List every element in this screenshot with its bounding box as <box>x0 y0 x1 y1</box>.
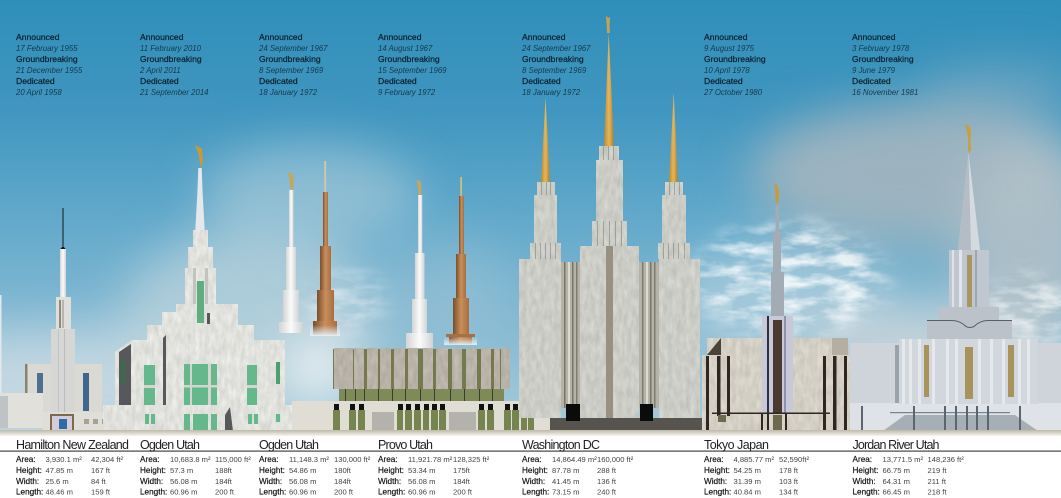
timeline: Tokyo: 27 October 1980 <box>703 88 763 97</box>
timeline: Provo: 9 February 1972 <box>378 88 436 97</box>
timeline: Washington DC: 18 January 1972 <box>522 88 581 97</box>
timeline: Ogden 1972: Dedicated <box>259 76 298 86</box>
stats: Washington DC: Length: <box>522 488 549 496</box>
stats: Tokyo Japan: 31.39 m <box>734 477 761 486</box>
timeline: Ogden 1972: Announced <box>259 32 303 42</box>
stats: Hamilton New Zealand: Area: <box>16 455 36 464</box>
stats: Washington DC: Height: <box>522 466 548 475</box>
grey spire <box>771 205 784 316</box>
low base <box>292 401 550 431</box>
stats: Provo Utah: 60.96 m <box>408 488 435 496</box>
stats: Hamilton New Zealand: Hamilton New Zealand <box>16 438 129 452</box>
stats: Hamilton New Zealand: 167 ft <box>91 466 111 475</box>
building: Ogden Utah original spires <box>279 161 340 336</box>
timeline: Jordan River: 16 November 1981 <box>852 88 918 97</box>
timeline: Ogden 1972: 24 September 1967 <box>258 44 328 53</box>
stats: Washington DC: 288 ft <box>597 466 617 475</box>
statue: gold angel <box>774 183 779 205</box>
green bays with black caps <box>333 410 534 431</box>
stats: Tokyo Japan: 52,590ft² <box>779 455 809 464</box>
stats: Jordan River Utah: 13,771.5 m² <box>882 455 923 464</box>
stats: Ogden Utah 2014: 10,683.8 m² <box>170 455 211 464</box>
stats: Jordan River Utah: Width: <box>852 477 876 486</box>
stats: Tokyo Japan: Length: <box>704 488 731 496</box>
building: Tokyo Japan temple <box>702 183 852 431</box>
stats: Tokyo Japan: Width: <box>704 477 727 486</box>
stats: Provo Utah: Area: <box>378 455 398 464</box>
timeline: Jordan River: 9 June 1979 <box>852 66 896 75</box>
timeline: Hamilton: 20 April 1958 <box>15 88 62 97</box>
shadow recesses <box>119 313 233 431</box>
stats: Ogden Utah 1972: Height: <box>259 466 285 475</box>
stats: Provo Utah: Height: <box>378 466 404 475</box>
timeline: Jordan River: Dedicated <box>852 76 891 86</box>
timeline: Ogden 1972: 8 September 1969 <box>259 66 324 75</box>
bronze spire <box>310 161 340 336</box>
timeline: Provo: 15 September 1969 <box>378 66 447 75</box>
timeline: Hamilton: 21 December 1955 <box>15 66 83 75</box>
timeline: Ogden 1972: Groundbreaking <box>259 54 321 64</box>
stats: Tokyo Japan: Height: <box>704 466 730 475</box>
timeline: Washington DC: Announced <box>522 32 566 42</box>
building: Washington DC temple <box>519 16 710 432</box>
timeline: Washington DC <box>521 32 591 97</box>
stats: Hamilton New Zealand: 48.46 m <box>46 488 73 496</box>
timeline: Ogden 2014: 11 February 2010 <box>140 44 202 53</box>
stats: Washington DC: 14,864.49 m² <box>552 455 597 464</box>
timeline: Provo: 14 August 1967 <box>378 44 433 53</box>
stats: Ogden Utah 2014: Length: <box>140 488 167 496</box>
ribbed bays <box>561 262 659 408</box>
stats: Hamilton New Zealand <box>16 438 129 496</box>
stats: Ogden Utah 1972: 180ft <box>334 466 352 475</box>
stats: Jordan River Utah: 218 ft <box>928 488 947 496</box>
stats: Washington DC: 160,000 ft² <box>597 455 634 464</box>
stats: Provo Utah: 11,921.78 m² <box>408 455 453 464</box>
stats: Ogden Utah 2014: 60.96 m <box>170 488 197 496</box>
stats: Ogden Utah 1972: Ogden Utah <box>259 438 319 452</box>
stats: Jordan River Utah: 219 ft <box>928 466 947 475</box>
stats: Hamilton New Zealand: 3,930.1 m² <box>46 455 82 464</box>
timeline: Jordan River <box>852 32 918 97</box>
stats: Washington DC: Width: <box>522 477 545 486</box>
timeline: Tokyo: Groundbreaking <box>704 54 766 64</box>
dark stripes <box>706 356 847 431</box>
timeline: Tokyo: 10 April 1978 <box>704 66 750 75</box>
stats: Ogden Utah 1972: 130,000 ft² <box>334 455 371 464</box>
stats: Hamilton New Zealand: 25.6 m <box>46 477 69 486</box>
stats: Washington DC: 240 ft <box>597 488 617 496</box>
stats: Ogden Utah 2014: 56.08 m <box>170 477 197 486</box>
timeline: Ogden 2014: 21 September 2014 <box>139 88 209 97</box>
stats: Hamilton New Zealand: Width: <box>16 477 39 486</box>
timeline: Tokyo: Dedicated <box>704 76 743 86</box>
timeline: Provo <box>378 32 447 97</box>
white spire <box>406 180 433 348</box>
stats: Ogden Utah 2014: Height: <box>140 466 166 475</box>
tower <box>927 250 1012 340</box>
timeline: Hamilton: 17 February 1955 <box>16 44 78 53</box>
timeline: Washington DC: 24 September 1967 <box>521 44 591 53</box>
statue: gold angel <box>965 124 971 153</box>
stats: Jordan River Utah: 64.31 m <box>882 477 910 486</box>
stats: Hamilton New Zealand: 42,304 ft² <box>91 455 124 464</box>
side wings <box>850 343 1061 403</box>
stats: Tokyo Japan: 54.25 m <box>734 466 761 475</box>
stats: Tokyo Japan: 103 ft <box>779 477 799 486</box>
timeline: Ogden 2014: Groundbreaking <box>140 54 202 64</box>
stats: Tokyo Japan: 4,885.77 m² <box>734 455 774 464</box>
doors and plinth <box>550 404 710 432</box>
stats: Ogden Utah 1972: 54.86 m <box>289 466 316 475</box>
timeline: Provo: Announced <box>378 32 422 42</box>
stats: Washington DC: 41.45 m <box>552 477 579 486</box>
stats: Washington DC: 73.15 m <box>552 488 579 496</box>
stats: Provo Utah: Width: <box>378 477 401 486</box>
stats: Ogden Utah 1972 <box>259 438 371 496</box>
timeline: Hamilton: Announced <box>16 32 60 42</box>
timeline: Ogden 1972 <box>258 32 328 97</box>
stats: Hamilton New Zealand: 84 ft <box>91 477 107 486</box>
timeline: Jordan River: 3 February 1978 <box>852 44 910 53</box>
stats: Washington DC: 136 ft <box>597 477 617 486</box>
spire <box>958 153 980 250</box>
timeline: Ogden 2014: Dedicated <box>140 76 179 86</box>
stats: Tokyo Japan: 134 ft <box>779 488 799 496</box>
entrance <box>860 404 1061 431</box>
stats: Ogden Utah 1972: 200 ft <box>334 488 354 496</box>
main ribbed body <box>895 339 1038 404</box>
stats: Ogden Utah 1972: 56.08 m <box>289 477 316 486</box>
stats: Ogden Utah 2014: Width: <box>140 477 163 486</box>
stats: Provo Utah: Length: <box>378 488 405 496</box>
building: Ogden Utah temple (2014) <box>103 145 330 431</box>
stats: Ogden Utah 2014: 200 ft <box>215 488 235 496</box>
stats: Provo Utah: 128,325 ft² <box>453 455 490 464</box>
timeline: Ogden 2014: 2 April 2011 <box>139 66 181 75</box>
upper box panels <box>333 348 510 389</box>
stats: Jordan River Utah: 148,236 ft² <box>928 455 964 464</box>
stats: Tokyo Japan <box>704 438 809 496</box>
stats: Jordan River Utah: 66.45 m <box>882 488 910 496</box>
Hamilton spire <box>51 208 75 413</box>
stats: Washington DC <box>522 438 634 496</box>
timeline: Jordan River: Announced <box>852 32 896 42</box>
central tower <box>762 316 793 413</box>
stats: Jordan River Utah: Length: <box>852 488 880 496</box>
green windows <box>144 362 317 430</box>
timeline: Tokyo: 9 August 1975 <box>704 44 755 53</box>
stats: Provo Utah <box>378 438 490 496</box>
ground strip <box>0 430 1061 437</box>
stats: Washington DC: 87.78 m <box>552 466 579 475</box>
timeline: Washington DC: Groundbreaking <box>522 54 584 64</box>
stats: Provo Utah: 53.34 m <box>408 466 435 475</box>
stats: Ogden Utah 1972: 184ft <box>334 477 352 486</box>
timeline: Ogden 1972: 18 January 1972 <box>259 88 318 97</box>
timeline: Hamilton <box>15 32 83 97</box>
building: Hamilton New Zealand temple <box>0 208 125 430</box>
stats: Provo Utah: 200 ft <box>453 488 473 496</box>
stats: Ogden Utah 1972: Area: <box>259 455 279 464</box>
stats: Tokyo Japan: 40.84 m <box>734 488 761 496</box>
stats: Jordan River Utah: Jordan River Utah <box>852 438 940 452</box>
timeline: Ogden 2014 <box>139 32 209 97</box>
green band <box>339 389 504 401</box>
statue: gold angel <box>606 16 610 33</box>
stats: Jordan River Utah: Height: <box>852 466 878 475</box>
building: Provo Utah temple <box>292 177 550 431</box>
stats: Ogden Utah 2014: Area: <box>140 455 160 464</box>
Hamilton wings <box>0 364 125 430</box>
stats: Ogden Utah 1972: Length: <box>259 488 286 496</box>
stats: Tokyo Japan: Area: <box>704 455 724 464</box>
timeline: Tokyo <box>703 32 766 97</box>
timeline: Hamilton: Groundbreaking <box>16 54 78 64</box>
stone blocks <box>702 338 852 431</box>
statue: gold angel <box>195 145 203 168</box>
stats: Jordan River Utah <box>852 438 964 496</box>
stats: Jordan River Utah: 211 ft <box>928 477 947 486</box>
timeline: Provo: Groundbreaking <box>378 54 440 64</box>
stats: Tokyo Japan: Tokyo Japan <box>704 438 769 452</box>
stats: Washington DC: Washington DC <box>522 438 600 452</box>
central ornamental strip <box>606 246 613 418</box>
stats: Ogden Utah 2014: 188ft <box>215 466 233 475</box>
white spire <box>279 172 303 333</box>
stats: Ogden Utah 2014 <box>140 438 251 496</box>
stats: Ogden Utah 1972: 60.96 m <box>289 488 316 496</box>
gold windows <box>924 345 1014 399</box>
stats: Washington DC: Area: <box>522 455 542 464</box>
timeline: Tokyo: Announced <box>704 32 748 42</box>
stats: Hamilton New Zealand: 47.85 m <box>46 466 73 475</box>
stats: Provo Utah: 175ft <box>453 466 471 475</box>
stats: Ogden Utah 2014: 184ft <box>215 477 233 486</box>
stats: Tokyo Japan: 178 ft <box>779 466 799 475</box>
building: Jordan River Utah temple <box>850 124 1061 431</box>
stats: Hamilton New Zealand: Height: <box>16 466 42 475</box>
timeline: Provo: Dedicated <box>378 76 417 86</box>
stats: Ogden Utah 2014: Ogden Utah <box>140 438 200 452</box>
timeline: Washington DC: 8 September 1969 <box>522 66 587 75</box>
stats: Ogden Utah 2014: 57.3 m <box>170 466 193 475</box>
divider line <box>0 450 1061 452</box>
timeline: Washington DC: Dedicated <box>522 76 561 86</box>
stats: Jordan River Utah: Area: <box>852 455 872 464</box>
stats: Provo Utah: 56.08 m <box>408 477 435 486</box>
timeline: Hamilton: Dedicated <box>16 76 55 86</box>
stats: Ogden Utah 1972: 11,148.3 m² <box>289 455 329 464</box>
stats: Jordan River Utah: 66.75 m <box>882 466 910 475</box>
gold spires <box>541 33 678 182</box>
stone towers <box>519 146 700 418</box>
stats: Ogden Utah 2014: 115,000 ft² <box>215 455 251 464</box>
stats: Provo Utah: 184ft <box>453 477 471 486</box>
timeline: Jordan River: Groundbreaking <box>852 54 914 64</box>
bronze spire <box>444 177 477 345</box>
stats: Ogden Utah 1972: Width: <box>259 477 282 486</box>
stats: Hamilton New Zealand: Length: <box>16 488 43 496</box>
stats: Provo Utah: Provo Utah <box>378 438 433 452</box>
stats: Hamilton New Zealand: 159 ft <box>91 488 111 496</box>
timeline: Ogden 2014: Announced <box>140 32 184 42</box>
